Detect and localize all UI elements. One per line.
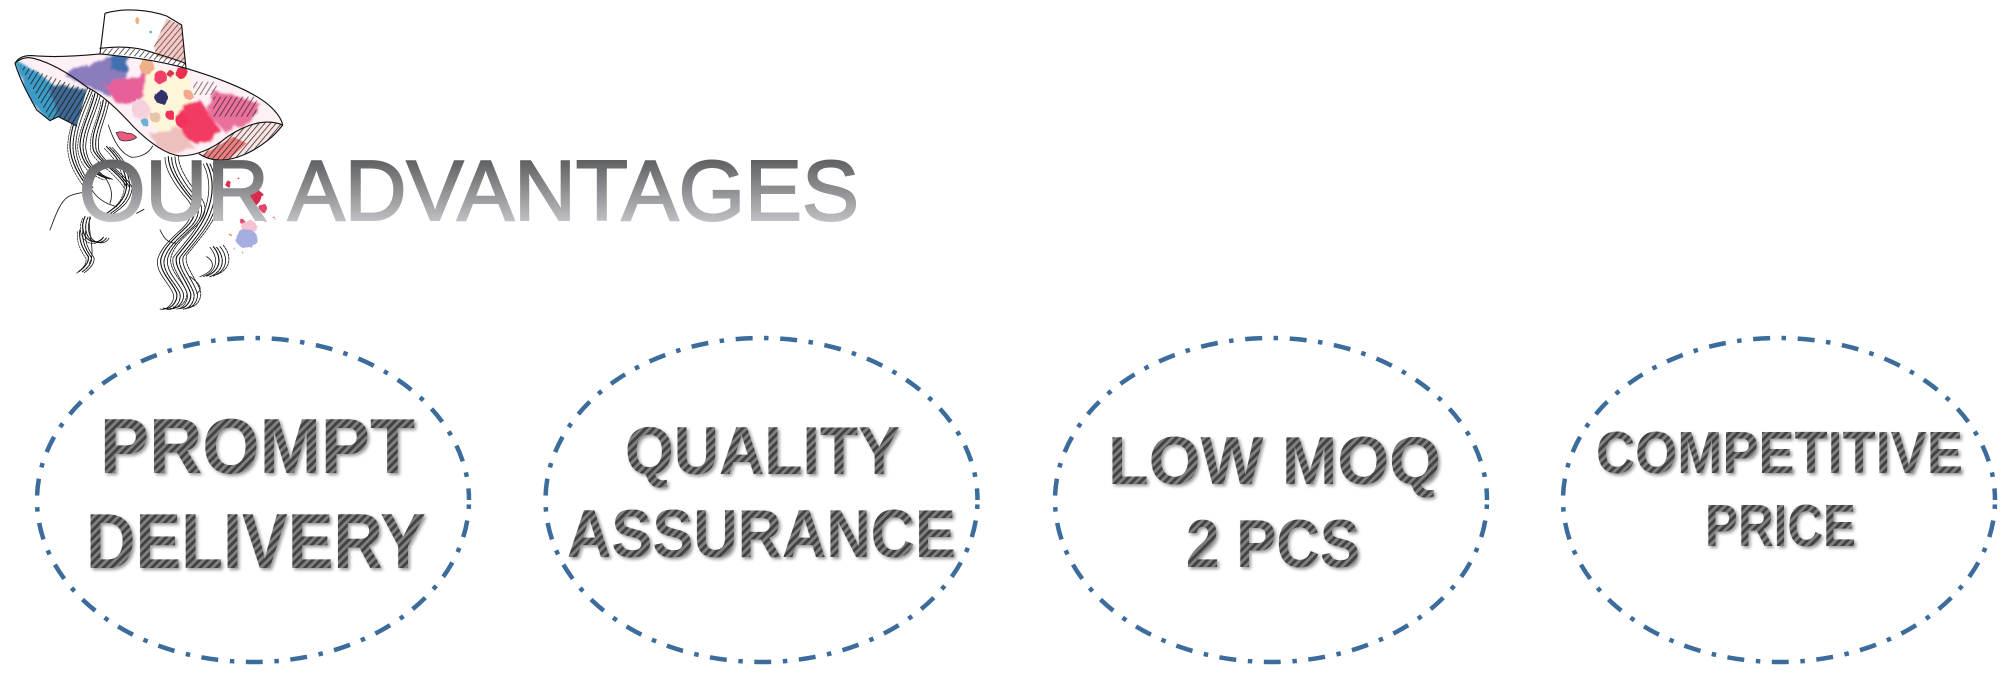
hat crown (101, 17, 185, 67)
label: prompt delivery: PROMPT (100, 402, 415, 490)
label: low moq 2 pcs (1108, 423, 1441, 582)
shoulder (50, 193, 144, 230)
title: OUR ADVANTAGES (79, 144, 859, 239)
label: quality assurance: QUALITY (625, 413, 900, 489)
hair strands left (68, 88, 132, 273)
dashed ellipse 1 (37, 338, 469, 662)
label: quality assurance (567, 413, 956, 572)
label: quality assurance: ASSURANCE (567, 496, 956, 572)
illustration: woman in watercolor sun hat (10, 7, 287, 309)
face and lips (108, 125, 153, 157)
label: competitive price (1596, 420, 1963, 559)
label: low moq 2 pcs: 2 PCS (1186, 506, 1360, 582)
hat outlines (100, 10, 186, 68)
hair strands right (157, 155, 229, 309)
dashed ellipse 3 (1055, 338, 1487, 662)
label: competitive price: PRICE (1705, 493, 1856, 559)
dashed ellipse 2 (546, 338, 978, 662)
card: prompt delivery (37, 338, 469, 662)
paint splatter (225, 178, 275, 253)
card: low moq (1055, 338, 1487, 662)
label: prompt delivery (86, 402, 426, 585)
dashed ellipse 4 (1563, 338, 1995, 662)
hat watercolor fill (16, 54, 282, 156)
label: low moq 2 pcs: LOW MOQ (1108, 423, 1441, 499)
label: competitive price: COMPETITIVE (1596, 420, 1963, 486)
card: quality assurance (546, 338, 978, 662)
hat brim underside (200, 122, 282, 160)
card: competitive price (1563, 338, 1995, 662)
label: prompt delivery: DELIVERY (86, 497, 426, 585)
